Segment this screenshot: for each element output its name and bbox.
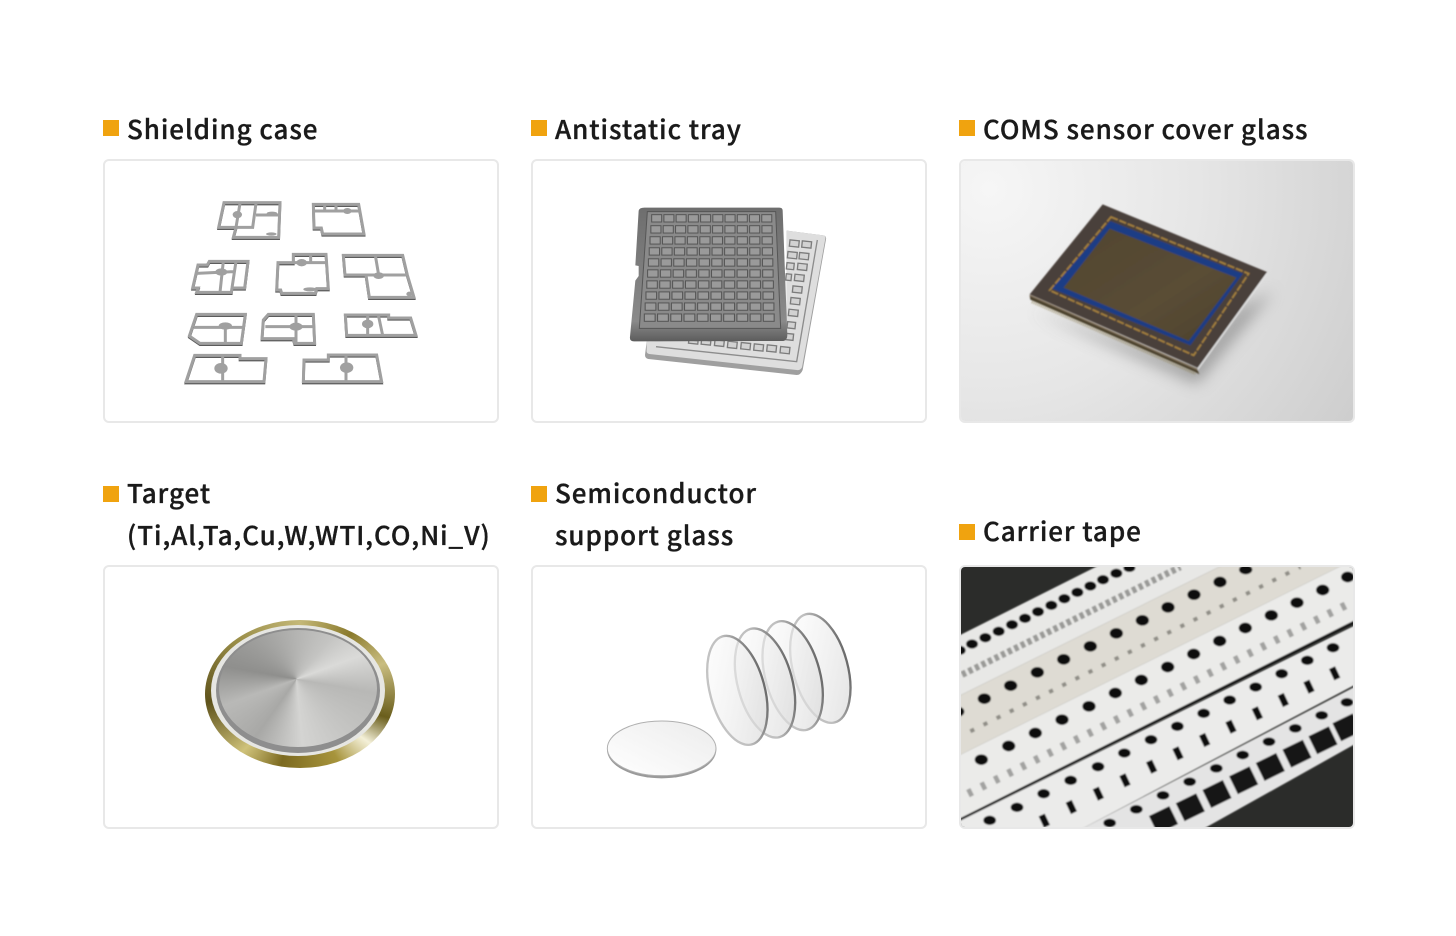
image sensor chip xyxy=(1030,204,1267,374)
small perforation rows xyxy=(962,567,1354,794)
icon: frame shadows xyxy=(186,204,416,383)
sprocket holes xyxy=(952,564,1354,827)
bullet: antistatic tray xyxy=(531,120,547,136)
background gradient xyxy=(959,159,1355,423)
image card: carrier tape photo xyxy=(959,565,1355,829)
square pockets xyxy=(1149,713,1362,834)
heading: semiconductor support glass: support glass xyxy=(555,516,734,553)
heading: semiconductor support glass xyxy=(555,474,757,553)
icon: rear light tray xyxy=(645,231,826,375)
image card: glass wafers xyxy=(531,565,927,829)
heading: carrier tape: Carrier tape xyxy=(983,512,1142,549)
heading: shielding case: Shielding case xyxy=(127,110,318,147)
bullet: target xyxy=(103,486,119,502)
heading: sensor cover glass: COMS sensor cover glass xyxy=(983,110,1308,147)
image card: antistatic trays xyxy=(531,159,927,423)
icon: frame contact pads xyxy=(214,208,412,374)
image card: sputtering target xyxy=(103,565,499,829)
icon: gold outer ring xyxy=(205,620,395,768)
bullet: sensor cover glass xyxy=(959,120,975,136)
icon: silver rim xyxy=(211,625,385,756)
icon: brushed disc centre xyxy=(219,630,377,747)
heading: target: Target xyxy=(127,474,211,511)
component slots xyxy=(1042,668,1337,826)
panel: CMOS sensor cover glass xyxy=(959,110,1355,423)
heading: target: (Ti,Al,Ta,Cu,W,WTI,CO,Ni_V) xyxy=(127,516,491,553)
panel: shielding case xyxy=(103,110,499,423)
icon: frame outlines xyxy=(186,203,416,382)
heading: antistatic tray: Antistatic tray xyxy=(555,110,742,147)
image card: shielding case frames xyxy=(103,159,499,423)
icon: front dark tray xyxy=(630,208,787,341)
icon: upright glass discs xyxy=(696,607,861,751)
shadow under chip xyxy=(1032,290,1274,384)
dark background xyxy=(957,563,1357,830)
panel: target xyxy=(103,474,499,829)
panel: antistatic tray xyxy=(531,110,927,423)
panel: semiconductor support glass xyxy=(531,474,927,829)
heading: target xyxy=(127,474,491,553)
tape strips xyxy=(957,565,1357,830)
bullet: carrier tape xyxy=(959,524,975,540)
icon: flat glass disc xyxy=(607,721,716,778)
panel: carrier tape xyxy=(959,512,1355,829)
icon: metal disc xyxy=(216,628,380,753)
bullet: semiconductor support glass xyxy=(531,486,547,502)
heading: semiconductor support glass: Semiconductor xyxy=(555,474,757,511)
image card: image sensor photo xyxy=(959,159,1355,423)
bullet: shielding case xyxy=(103,120,119,136)
tray pocket grid xyxy=(644,215,774,321)
